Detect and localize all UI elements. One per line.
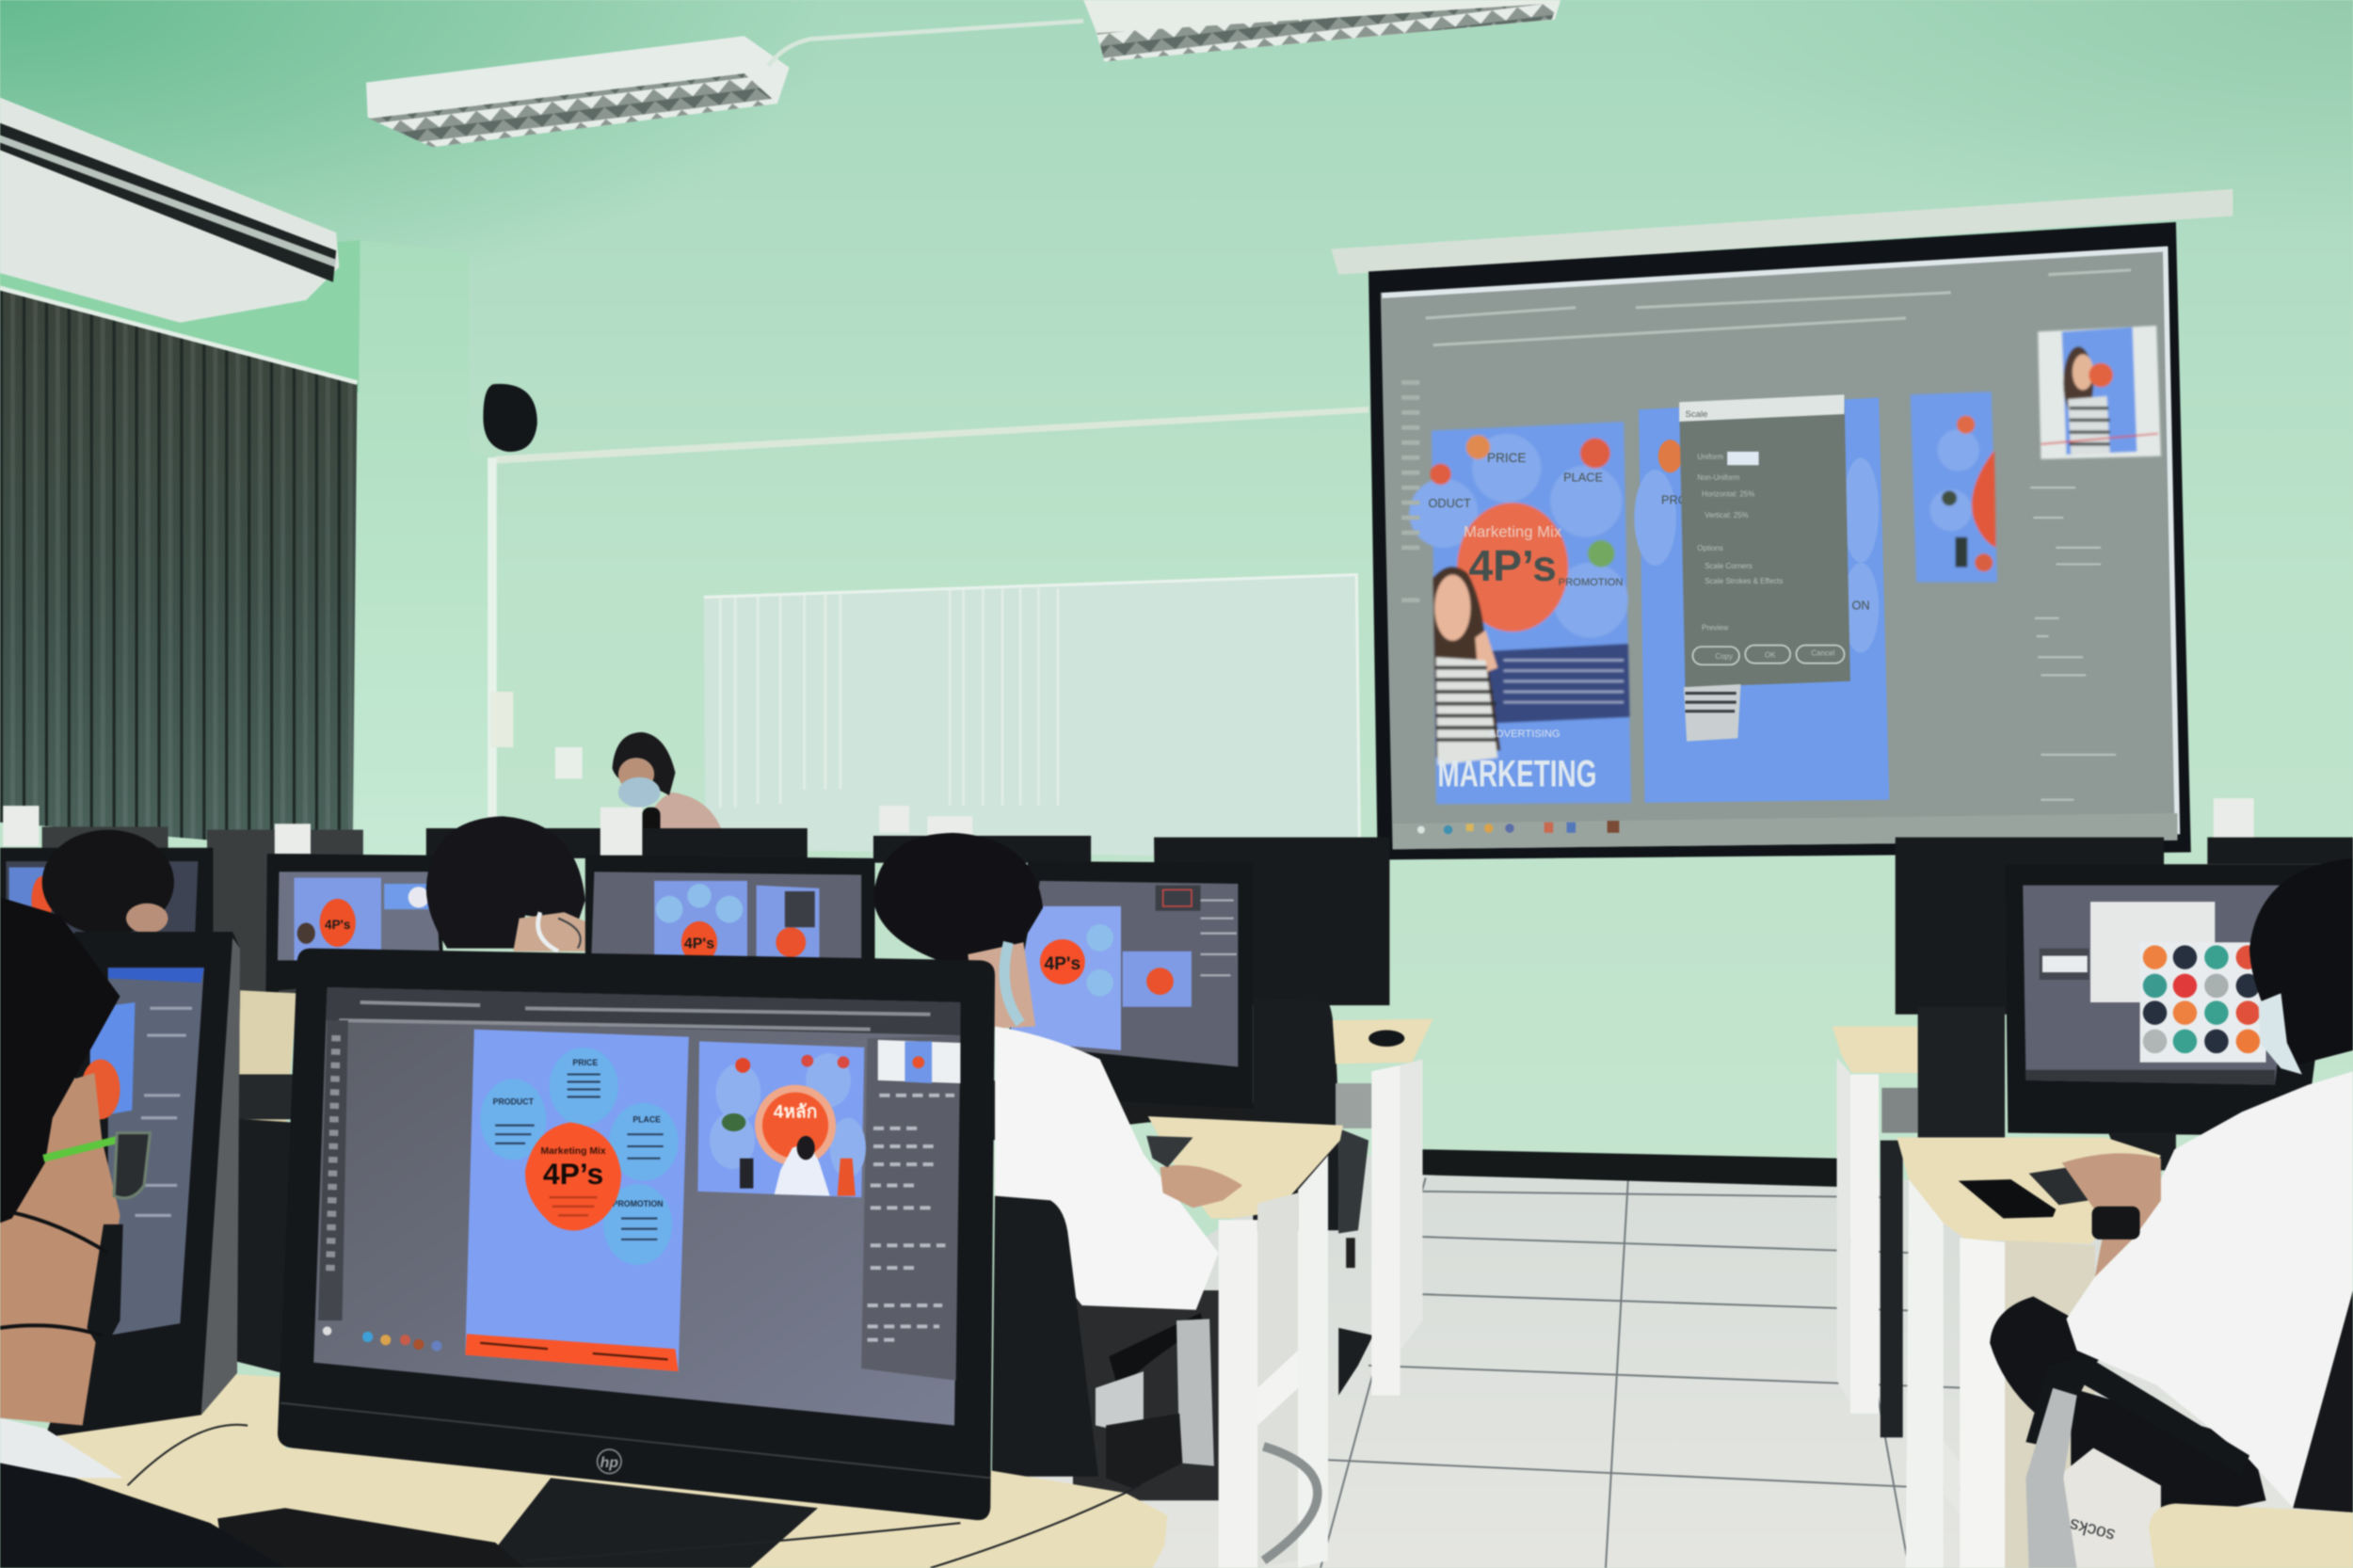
poster text: PLACE [1563,471,1603,485]
wall pipe [488,457,497,848]
mask edge [87,1224,123,1353]
hp logo: hp [600,1455,618,1471]
right properties panel details [2030,488,2116,800]
scale dialog: Uniform [1697,453,1724,461]
poster text: ODUCT [1429,496,1471,510]
monitor front right of centre [1002,861,1253,1109]
mask straps [0,1212,108,1336]
screen [313,987,960,1426]
projection screen [1331,189,2233,860]
student hair [2249,858,2353,1065]
foreground student left [0,897,285,1568]
dark shoulder [0,1463,285,1568]
air conditioner [0,98,339,323]
second artboard [697,1041,864,1197]
bottom right desk [2149,1503,2353,1568]
ceiling shadow left [0,0,840,330]
monitor second row left [265,854,444,1015]
forearm and hand [2062,1153,2161,1277]
scale dialog: Horizontal: 25% [1702,490,1754,499]
orange blob 4Ps: 4P’s [543,1157,603,1191]
right monitor [2005,864,2341,1171]
baseboard [1422,1149,1840,1187]
second artboard art [710,1053,866,1196]
icon sheet [2143,945,2260,1053]
ceiling light right [1083,0,1561,61]
poster bubbles [480,1048,679,1265]
scale dialog: Non-Uniform [1697,473,1740,482]
left toolbar [1401,383,1419,600]
person below dialog [1684,684,1740,742]
lower bezel line [280,1403,990,1478]
monitor second row left: 4P's [325,918,350,932]
app top bar [326,987,960,1035]
ceiling light left [366,36,790,147]
scale dialog: OK [1765,650,1776,659]
floor [960,1156,2353,1568]
round pillar [354,240,495,856]
artboard one [1409,422,1631,805]
monitor second row center: 4P's [684,936,714,952]
second artboard art: 4หลัก [774,1103,817,1123]
chair dark behind foreground [222,1118,293,1373]
back wall [0,0,2353,1200]
lower wall rail [495,407,1369,464]
taskbar icons [323,1326,442,1352]
scale dialog: Vertical: 25% [1705,511,1749,520]
side monitor left [45,932,240,1437]
poster bubble labels: PROMOTION [613,1199,664,1208]
teacher [613,732,723,838]
artboard two: ON [1851,598,1870,612]
foreground monitor [278,949,995,1568]
centre desk [1148,1116,1343,1568]
scale dialog [1679,394,1850,687]
rear monitors, backs [42,826,2353,1015]
white shirt [2066,1071,2353,1508]
sock bag: socks [2068,1514,2117,1545]
student head second row [426,816,588,952]
scale dialog: Scale Corners [1705,562,1753,570]
orange blob 4Ps [525,1123,621,1231]
monitor front right of centre: 4P's [1045,954,1080,974]
whiteboard [704,575,1360,858]
taskbar [1393,813,2177,849]
scale dialog: Scale Strokes & Effects [1705,577,1783,585]
poster bubble labels [493,1058,664,1240]
mouse on back desk [1369,1030,1404,1047]
scale dialog: Preview [1702,624,1729,632]
projected surface [1381,246,2177,849]
right chair [2025,1290,2353,1568]
notes on monitor tops [3,798,2254,856]
monitor stand [480,1478,818,1568]
face mask [2259,993,2302,1074]
centre student [873,833,1242,1310]
poster bubble labels: PLACE [632,1115,661,1125]
chair arm frame [2025,1356,2249,1475]
poster text: MARKETING [1437,753,1596,794]
green glasses [43,1136,132,1159]
orange footer bar [465,1334,679,1371]
orange blob 4Ps: Marketing Mix [541,1146,606,1157]
poster text: PROMOTION [1559,577,1623,588]
artboard two: PRO [1661,493,1688,507]
left wall strip [0,240,360,393]
window blinds [0,288,357,853]
keyboard centre [1146,1136,1193,1167]
monitor second row center [585,856,875,964]
poster text: PRICE [1487,451,1526,465]
back desk middle [1333,1019,1433,1396]
scale dialog: Options [1697,544,1723,552]
right front desk [1897,1137,2161,1568]
back chair centre [1253,998,1373,1396]
screen white edge [1382,249,2177,834]
poster text [1429,451,1623,794]
conduit [768,21,1083,66]
far left monitor [0,848,213,944]
student head far left [42,830,174,935]
sock bag [2056,1448,2161,1568]
area under centre desk [1073,1290,1219,1500]
artboard three [1911,392,1997,583]
student face [0,1073,120,1426]
right back desk [1833,1007,2005,1437]
left desk and keyboard [237,990,297,1133]
foreground desk [0,1373,1167,1568]
poster text: 4P’s [1468,541,1557,590]
screen black frame [1369,222,2191,860]
student hair [0,897,120,1223]
phone and keyboard on desk [1959,1167,2089,1219]
speaker [483,384,537,452]
window toolbar text [1426,270,2131,345]
wall switches [490,692,583,778]
scale dialog: Copy [1715,652,1733,661]
poster bubble labels: PRICE [572,1058,598,1067]
ceiling shadow right [1651,0,2353,240]
hp logo [598,1449,621,1474]
screen housing [1331,189,2233,275]
poster text: ADVERTISING [1489,728,1561,740]
poster bubble labels: PRODUCT [493,1096,535,1106]
foreground keyboard and cables [128,1425,1141,1568]
shadow behind monitor base [990,1080,1260,1141]
chair back [2293,1290,2353,1512]
trousers [1990,1296,2101,1418]
scale dialog: Cancel [1811,649,1834,658]
poster text: Marketing Mix [1464,523,1562,541]
centre chair [992,1196,1214,1489]
left tool strip [318,1020,348,1320]
right properties panel [861,1035,960,1381]
monitor bezel [278,949,995,1520]
white collar [0,1418,123,1478]
wristwatch [2092,1207,2140,1240]
scale dialog: Scale [1685,409,1707,420]
poster artboard [465,1030,689,1371]
right student [1990,858,2353,1523]
navigator thumbnail [2038,326,2161,459]
artboard two [1634,397,1889,803]
